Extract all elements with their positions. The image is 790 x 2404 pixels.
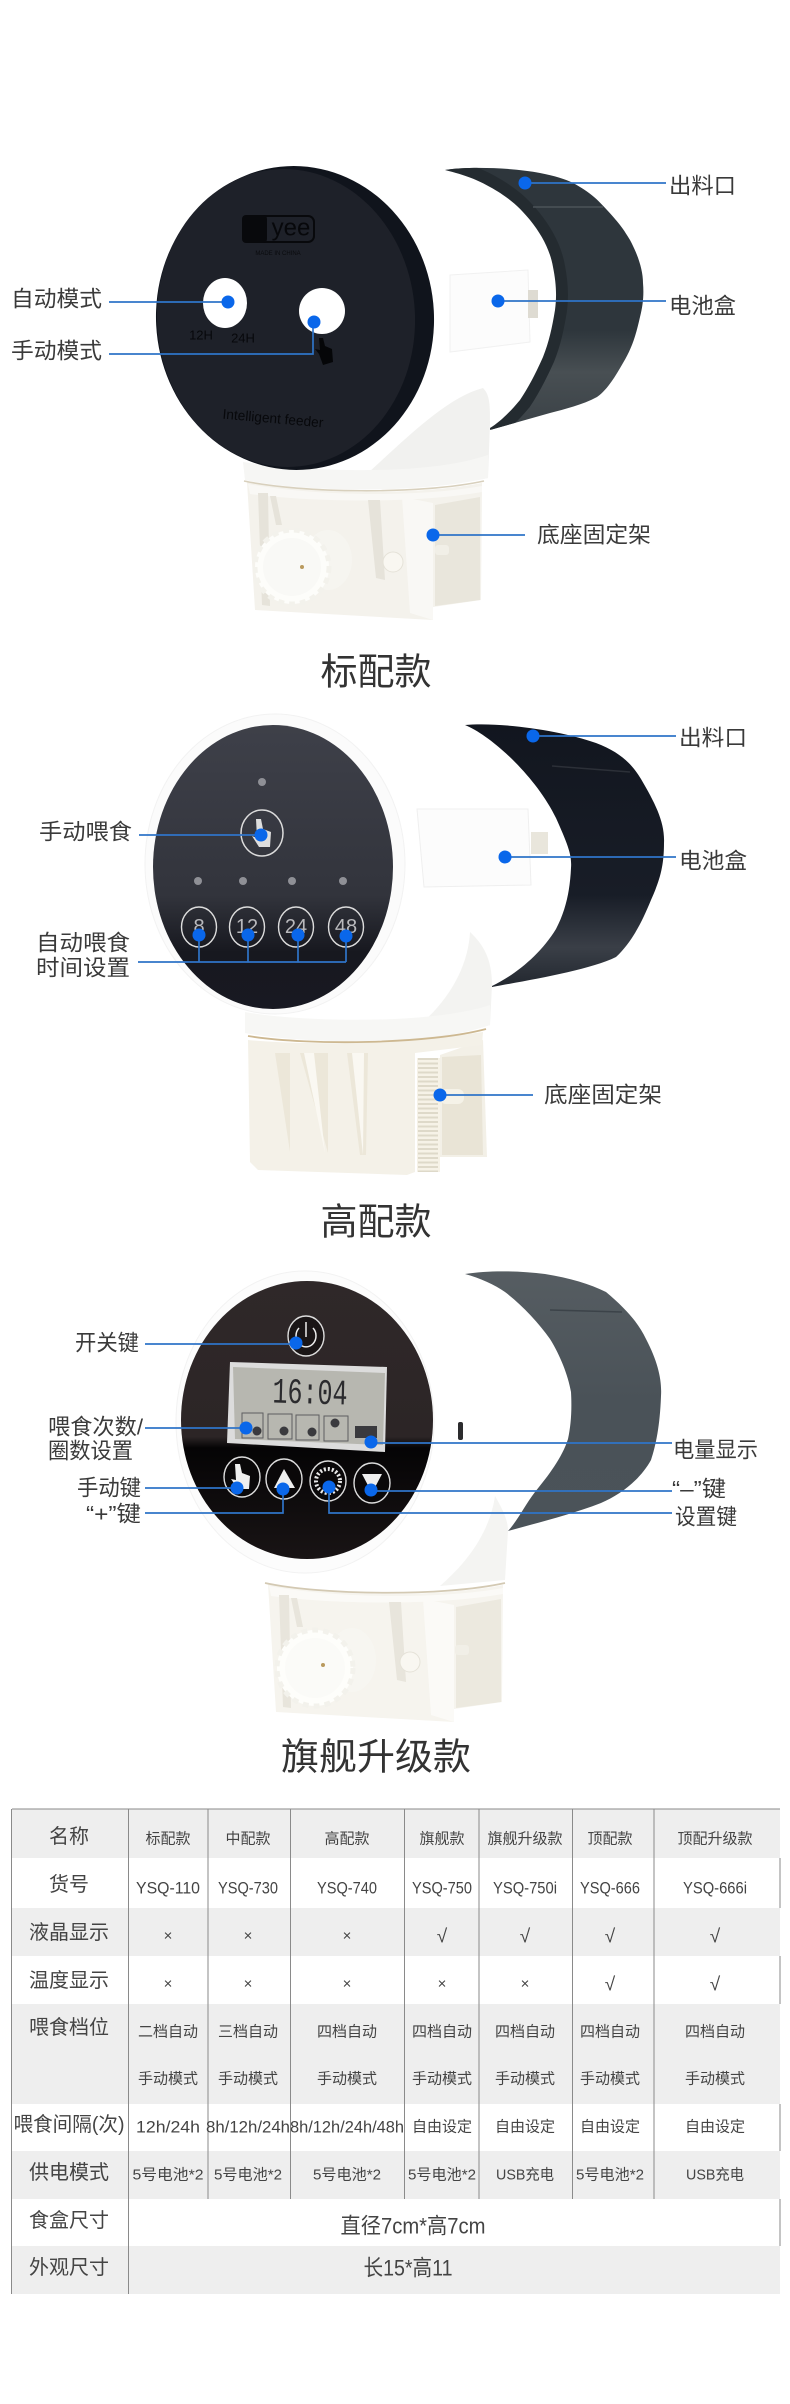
row: 温度显示: ×: [244, 1976, 252, 1992]
row: 喂食间隔: [136, 2118, 745, 2136]
title: 高配款: 高配款: [320, 1202, 432, 1242]
row: 喂食间隔: 12h/24h: [136, 2118, 200, 2136]
LCD screen: 16:04: [272, 1373, 348, 1415]
row: 喂食档位: 四档自动: [495, 2024, 555, 2040]
callout: 喂食次数/圈数设置: [48, 1414, 252, 1464]
manual feed button: [241, 810, 283, 856]
row: 供电模式: 5号电池*2: [408, 2166, 476, 2184]
brand logo: yee: [272, 214, 310, 242]
row: 名称: 中配款: [225, 1830, 271, 1848]
12H 24H marks: 24H: [231, 330, 255, 346]
row: 喂食档位: 二档自动: [138, 2024, 198, 2040]
row: 货号: YSQ-666: [580, 1878, 640, 1898]
callout: 自动喂食时间设置: 时间设置: [36, 956, 130, 980]
row: 喂食档位: 手动模式: [495, 2070, 555, 2088]
row headers: 液晶显示: [29, 1921, 109, 1944]
callout: 电量显示: 电量显示: [673, 1438, 758, 1462]
row: 喂食间隔: 8h/12h/24h: [206, 2118, 290, 2136]
product: standard feeder: [148, 159, 643, 620]
front panel: [153, 725, 393, 1009]
front panel: [148, 159, 442, 477]
row: 液晶显示: [164, 1926, 721, 1948]
table row shading: [12, 1809, 780, 2294]
row: 食盒尺寸: 直径7cm*高7cm: [340, 2214, 486, 2238]
row: 货号: YSQ-740: [317, 1878, 377, 1898]
row: 喂食档位: 三档自动: [218, 2024, 278, 2040]
row: 供电模式: 5号电池*2: [214, 2166, 282, 2184]
callout: 手动喂食: [39, 820, 268, 844]
callout: 电池盒: [492, 294, 736, 318]
callout: 手动键: [77, 1476, 244, 1500]
row: 名称: 旗舰升级款: [487, 1830, 563, 1848]
row: 液晶显示: √: [520, 1926, 531, 1948]
callout: “–”键: [364, 1476, 726, 1502]
base clamp: [265, 1583, 505, 1722]
row: 温度显示: ×: [164, 1976, 172, 1992]
side port: [458, 1422, 463, 1440]
callout: 手动模式: 手动模式: [11, 338, 102, 364]
row: 货号: YSQ-110: [136, 1878, 200, 1898]
row headers: 供电模式: [29, 2161, 109, 2184]
row: 喂食档位: 手动模式: [317, 2070, 377, 2088]
row: 喂食档位: 手动模式: [218, 2070, 278, 2088]
row: 喂食档位: 手动模式: [412, 2070, 472, 2088]
row headers: 食盒尺寸: [29, 2209, 109, 2232]
drum ridge: [550, 1310, 622, 1312]
callout: 设置键: 设置键: [675, 1504, 737, 1530]
row: 外观尺寸: 长15*高11: [364, 2256, 452, 2280]
food drum: [465, 724, 664, 987]
callout: 电池盒: [498, 848, 747, 874]
row: 喂食档位: 手动模式: [580, 2070, 640, 2088]
front white rim: [145, 714, 405, 1014]
row: 货号: YSQ-750i: [493, 1878, 557, 1898]
clamp screw knob: [255, 530, 449, 604]
indicator lights: [194, 778, 347, 885]
icon: pointing hand: [315, 338, 333, 365]
base clamp: [244, 481, 484, 620]
callout: “+”键: “+”键: [86, 1502, 141, 1526]
row headers: 货号: [49, 1873, 89, 1896]
callout: “–”键: “–”键: [672, 1476, 726, 1502]
row: 喂食档位: 手动模式: [138, 2070, 198, 2088]
callout: 手动键: 手动键: [77, 1476, 141, 1500]
callout: 喂食次数/圈数设置: 圈数设置: [48, 1438, 133, 1464]
callout: 电量显示: [364, 1436, 758, 1462]
title: 标配款: 标配款: [320, 652, 432, 692]
white body: [243, 165, 556, 490]
base clamp: [248, 1029, 487, 1175]
row: 喂食间隔: 自由设定: [685, 2118, 745, 2136]
comparison table: [12, 1809, 780, 2294]
row: 液晶显示: √: [710, 1926, 721, 1948]
callout: 底座固定架: 底座固定架: [537, 522, 651, 548]
neck shading: [360, 388, 490, 485]
interval buttons: [182, 907, 364, 947]
row: 名称: 顶配升级款: [677, 1830, 753, 1848]
row: 供电模式: USB充电: [686, 2166, 744, 2184]
callout: 出料口: [526, 726, 747, 750]
callout: 出料口: 出料口: [669, 174, 736, 198]
row: 名称: 高配款: [324, 1830, 370, 1848]
white body: [245, 712, 571, 1041]
row: 名称: 旗舰款: [419, 1830, 465, 1848]
callout: 开关键: [75, 1330, 302, 1356]
drum ridge: [533, 206, 603, 208]
row: 温度显示: ×: [438, 1976, 446, 1992]
callout: 电池盒: 电池盒: [669, 294, 736, 318]
12H 24H marks: 12H: [189, 328, 213, 342]
callout: 电池盒: 电池盒: [679, 848, 747, 874]
collar lower band: [245, 1005, 490, 1041]
row: 喂食间隔: 自由设定: [495, 2118, 555, 2136]
row: 供电模式: 5号电池*2: [313, 2166, 381, 2184]
neck shading: [440, 1496, 508, 1586]
battery latch: [528, 290, 538, 318]
clamp screw knob: [277, 1628, 469, 1706]
row: 喂食档位: 四档自动: [317, 2024, 377, 2040]
food drum: [445, 168, 643, 430]
row headers: 名称: [49, 1825, 89, 1848]
callout: 手动喂食: 手动喂食: [39, 820, 132, 844]
row: 名称: 顶配款: [587, 1830, 633, 1848]
row: 液晶显示: ×: [244, 1928, 252, 1944]
callout: 自动喂食时间设置: [36, 928, 352, 980]
row: 温度显示: ×: [521, 1976, 529, 1992]
brand logo: MADE IN CHINA: [255, 251, 301, 257]
row headers: 温度显示: [29, 1969, 109, 1992]
table grid: [12, 1809, 780, 2294]
interval buttons: 48: [335, 916, 357, 938]
interval buttons: 8: [193, 916, 205, 938]
row headers: 喂食档位: [29, 2016, 109, 2039]
battery latch: [531, 832, 548, 854]
row: 温度显示: √: [605, 1974, 616, 1996]
battery door: [417, 809, 531, 887]
row: 液晶显示: ×: [164, 1928, 172, 1944]
row: 喂食间隔: 8h/12h/24h/48h: [290, 2118, 404, 2136]
callout: 手动模式: [11, 316, 320, 364]
interval buttons: 24: [285, 916, 307, 938]
row: 喂食档位: [138, 2024, 745, 2088]
callout: 出料口: 出料口: [679, 726, 747, 750]
row: 温度显示: ×: [343, 1976, 351, 1992]
neck shading: [400, 932, 492, 1040]
product: high-spec feeder: [145, 712, 664, 1175]
drum seam ring: [445, 170, 556, 428]
row: 供电模式: 5号电池*2: [576, 2166, 644, 2184]
food drum: [465, 1271, 661, 1531]
row: 液晶显示: √: [437, 1926, 448, 1948]
brand logo: [242, 214, 314, 257]
battery door: [450, 270, 530, 352]
row headers: 喂食间隔(次): [14, 2113, 124, 2136]
row: 名称: 标配款: [145, 1830, 191, 1848]
row: 喂食档位: 四档自动: [685, 2024, 745, 2040]
callout: 自动模式: [11, 286, 234, 312]
row: 液晶显示: ×: [343, 1928, 351, 1944]
drum ridge: [552, 766, 630, 772]
row: 喂食档位: 四档自动: [580, 2024, 640, 2040]
LCD screen: [227, 1362, 387, 1452]
row: 供电模式: 5号电池*2: [132, 2166, 204, 2184]
front white rim: [176, 1271, 434, 1573]
white body: [265, 1271, 571, 1590]
row: 液晶显示: √: [605, 1926, 616, 1948]
mode holes: [203, 278, 345, 334]
callout: 底座固定架: 底座固定架: [544, 1082, 662, 1108]
12H 24H marks: [189, 328, 255, 346]
power button: [288, 1316, 324, 1356]
row: 供电模式: USB充电: [496, 2166, 554, 2184]
callout: 开关键: 开关键: [75, 1330, 139, 1356]
row: 温度显示: [164, 1974, 721, 1996]
panel caption: Intelligent feeder: [222, 406, 324, 430]
product: flagship upgrade feeder: [176, 1271, 661, 1722]
callout: 底座固定架: [426, 522, 651, 548]
collar lower band: [243, 455, 488, 490]
callout: 底座固定架: [434, 1082, 662, 1108]
callout: 自动喂食时间设置: 自动喂食: [36, 930, 130, 956]
row: 温度显示: √: [710, 1974, 721, 1996]
row: 喂食档位: 四档自动: [412, 2024, 472, 2040]
row: 喂食档位: 手动模式: [685, 2070, 745, 2088]
callout: 设置键: [322, 1480, 737, 1530]
row: 货号: [136, 1878, 747, 1898]
front panel: [181, 1281, 433, 1559]
row: 供电模式: [132, 2166, 744, 2184]
row: 货号: YSQ-750: [412, 1878, 472, 1898]
title: 旗舰升级款: 旗舰升级款: [281, 1736, 471, 1778]
row: 货号: YSQ-666i: [683, 1878, 747, 1898]
row: 喂食间隔: 自由设定: [580, 2118, 640, 2136]
control buttons: [224, 1457, 390, 1503]
row: 喂食间隔: 自由设定: [412, 2118, 472, 2136]
callout: 出料口: [518, 174, 736, 198]
row headers: 外观尺寸: [29, 2256, 109, 2279]
row: 名称: [145, 1830, 753, 1848]
callout: “+”键: [86, 1482, 290, 1526]
interval buttons: 12: [236, 916, 258, 938]
row headers: [14, 1825, 124, 2279]
callout: 喂食次数/圈数设置: 喂食次数/: [48, 1414, 144, 1440]
row: 货号: YSQ-730: [218, 1878, 278, 1898]
callout: 自动模式: 自动模式: [11, 286, 102, 312]
